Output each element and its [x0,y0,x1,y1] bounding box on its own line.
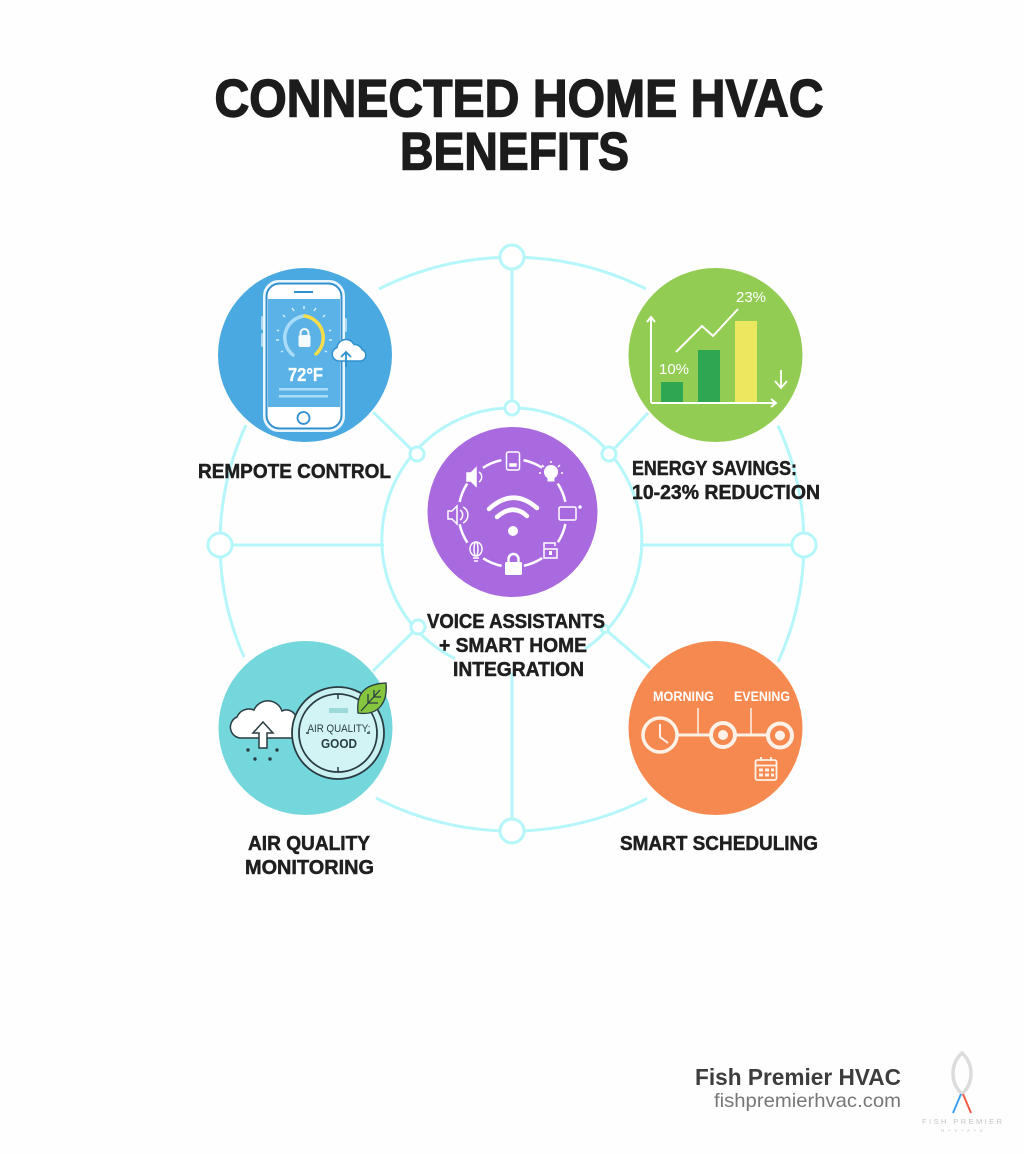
icon: air quality dial: AIR QUALITY: [308,723,370,735]
panel: air quality monitoring [218,641,392,815]
label: air quality monitoring: AIR QUALITY [248,833,371,855]
label: energy savings [632,458,820,504]
title [214,70,824,182]
icon: leaf [358,683,386,713]
logo: fish premier: FISH PREMIER [922,1117,1003,1126]
icon: wifi [489,498,537,536]
footer brand text: Fish Premier HVAC [695,1064,901,1090]
bar chart [647,289,787,407]
icon: cloud upload [332,340,366,367]
icon: air quality dial: GOOD [321,736,357,751]
schedule timeline: EVENING [734,689,790,704]
icon: smartphone with thermostat [261,281,347,431]
footer brand text [695,1064,901,1112]
icons: smart devices [448,452,581,575]
icon: calendar [756,757,776,780]
icon: cloud with up arrow [230,701,296,761]
bar chart: 23% [736,289,766,306]
temperature reading: 72°F [288,365,323,385]
logo: fish premier: H • V • A • C [941,1128,984,1133]
label: remote control: REMPOTE CONTROL [198,461,391,483]
icon: air quality dial [292,687,384,779]
label: voice assistants: + SMART HOME [439,635,587,657]
label: energy savings: 10-23% REDUCTION [632,482,820,504]
label: air quality monitoring: MONITORING [245,857,374,879]
panel: remote control [218,268,392,442]
label: energy savings: ENERGY SAVINGS: [632,458,797,480]
bar chart: 10% [659,361,689,378]
title: BENEFITS [400,122,629,182]
device ring [458,459,566,567]
panel: energy savings [628,268,802,442]
logo: fish premier [922,1053,1003,1133]
label: voice assistants [427,611,605,681]
title: CONNECTED HOME HVAC [214,70,824,128]
label: voice assistants: VOICE ASSISTANTS [427,611,605,633]
schedule timeline [643,689,792,752]
label: air quality monitoring [245,833,374,879]
network connector diagram [208,245,816,843]
footer brand text: fishpremierhvac.com [714,1090,901,1112]
schedule timeline: MORNING [653,689,714,704]
panel: voice assistants hub [428,427,598,597]
label: smart scheduling: SMART SCHEDULING [620,833,818,855]
label: voice assistants: INTEGRATION [453,659,584,681]
panel: smart scheduling [628,641,802,815]
